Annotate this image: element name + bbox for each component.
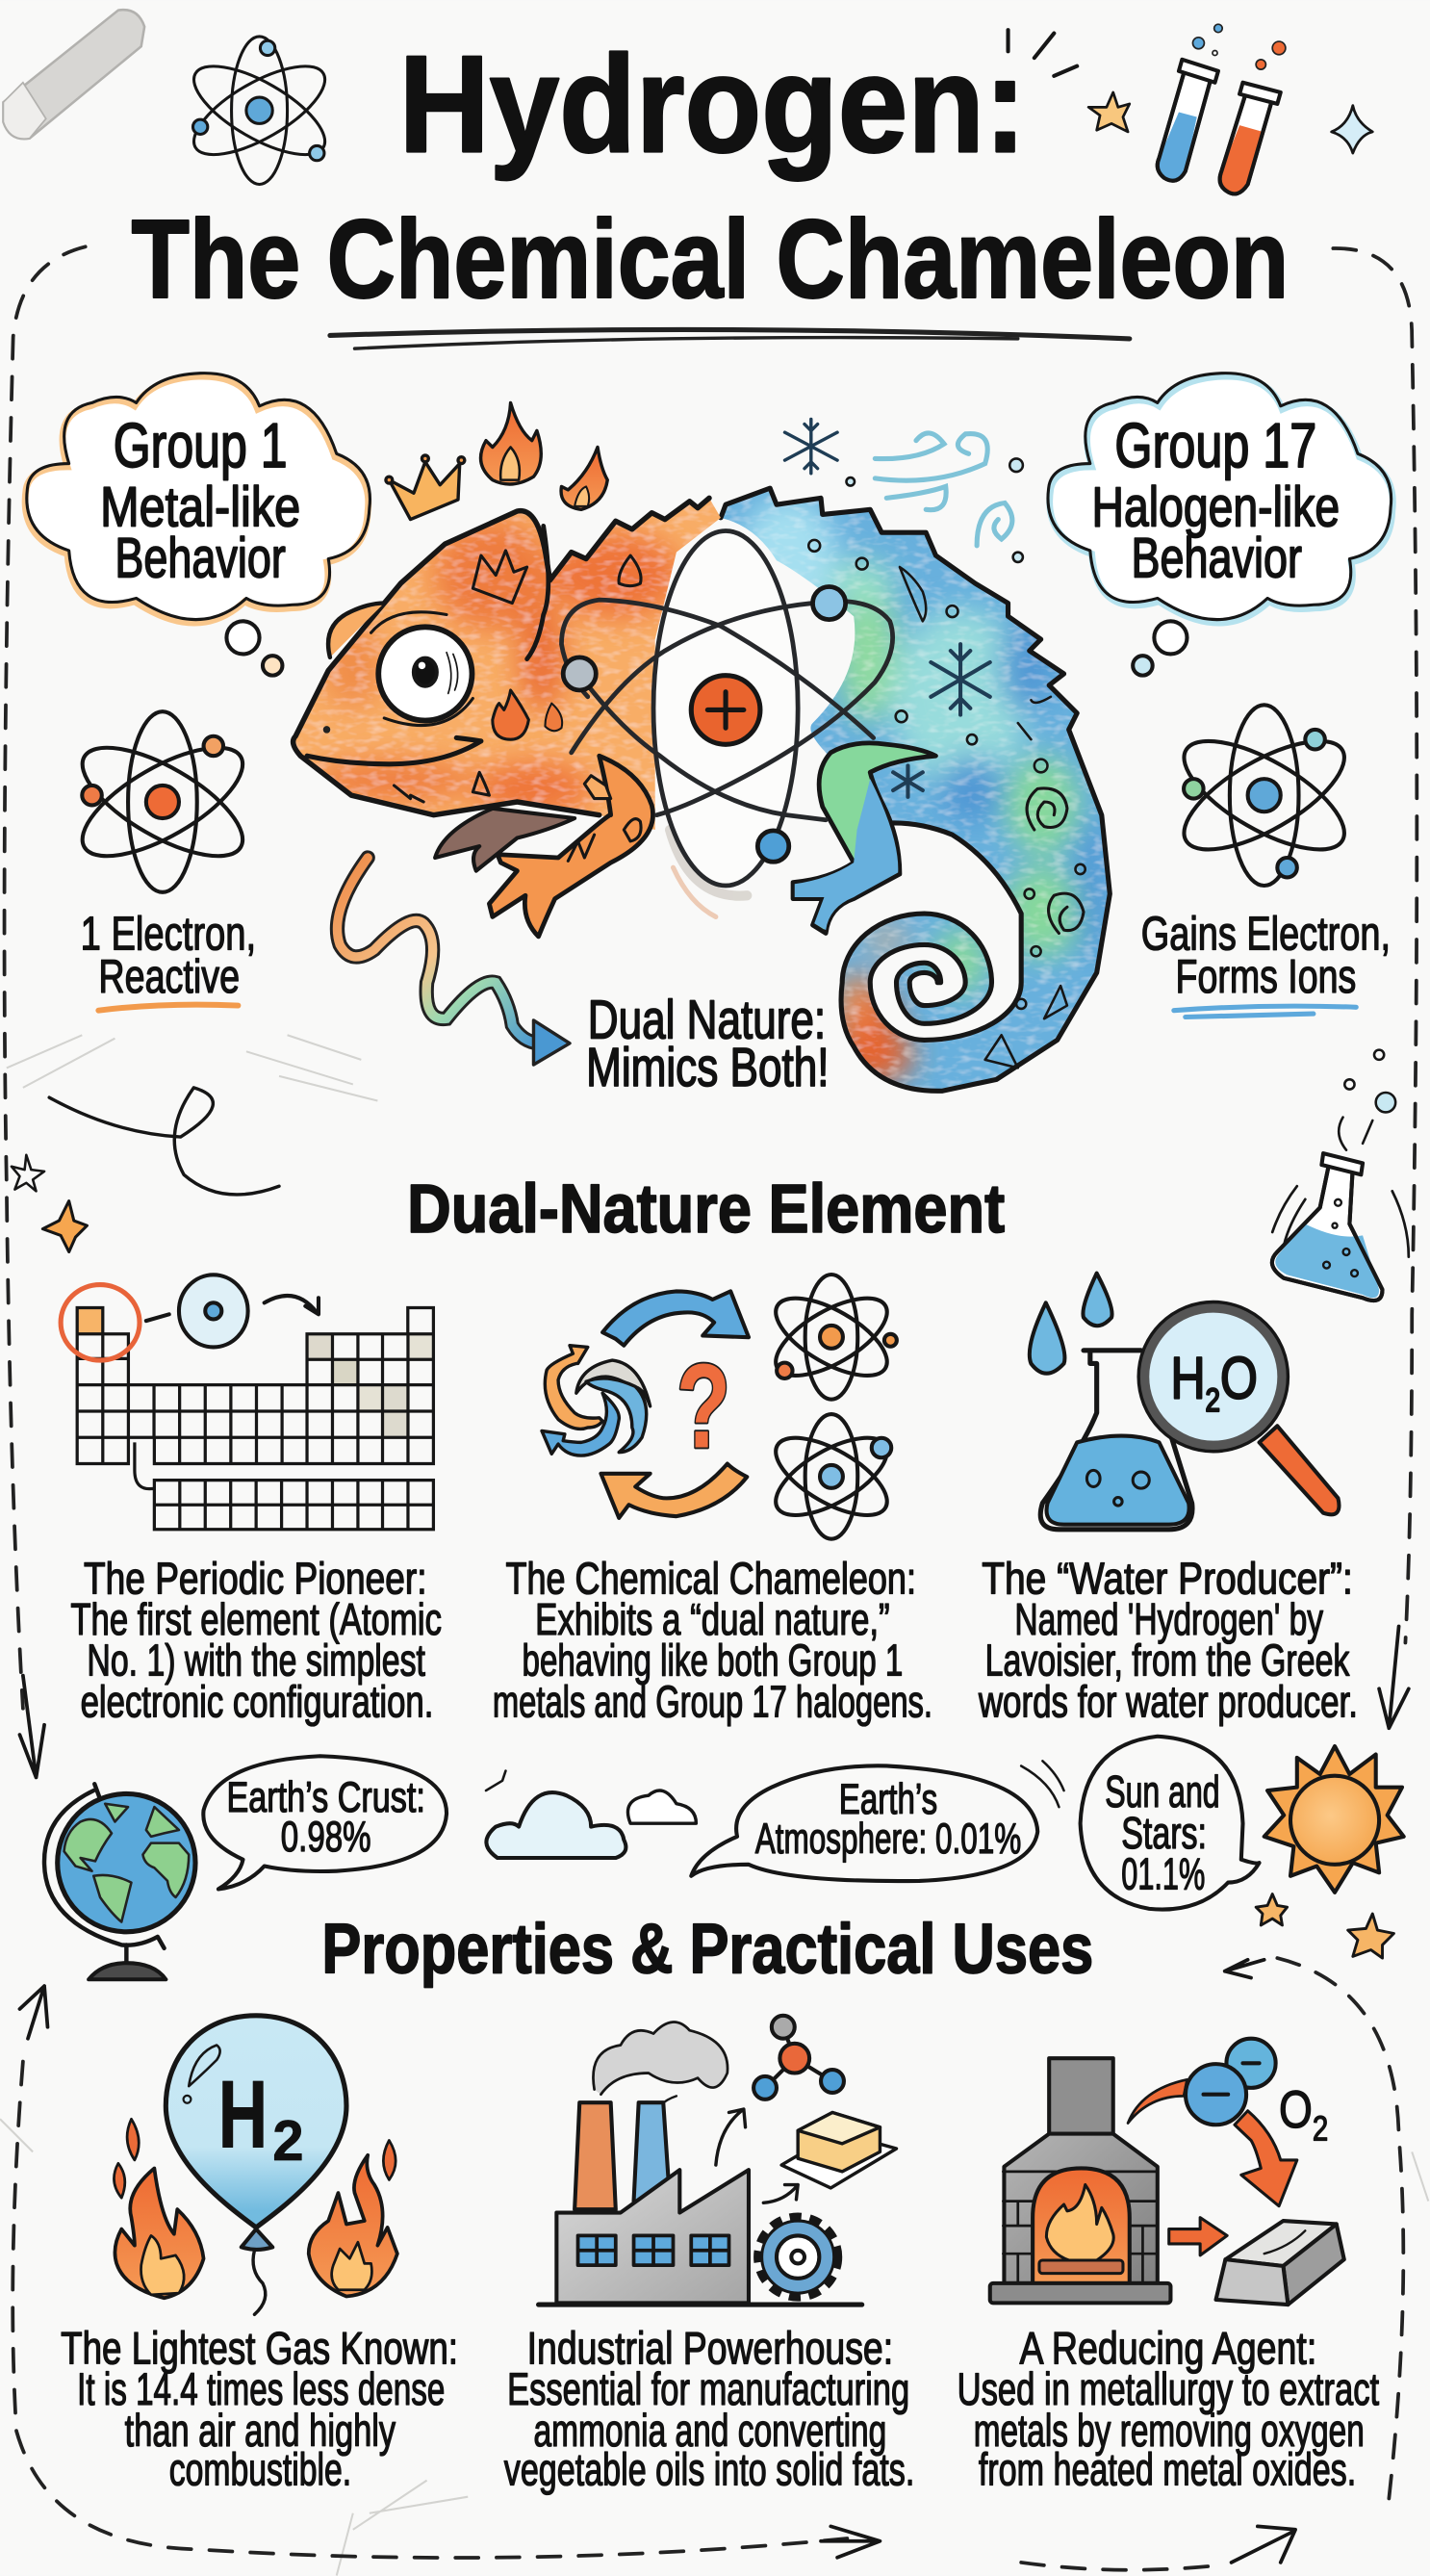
arrows bbox=[716, 2109, 798, 2202]
decorations: snowflake bbox=[785, 419, 837, 474]
icon: clouds bbox=[486, 1771, 696, 1858]
O2 label: O bbox=[1279, 2080, 1319, 2139]
flask bbox=[1040, 1351, 1192, 1530]
text: reducing agent: A Reducing Agent: bbox=[1019, 2323, 1316, 2373]
title line 1: Hydrogen: bbox=[399, 27, 1026, 181]
dashed frame bottom bbox=[13, 1958, 1403, 2570]
icon: test tubes bbox=[1158, 24, 1286, 193]
shaded cells bbox=[77, 1307, 433, 1436]
cloud text: Halogen-like bbox=[1092, 476, 1340, 538]
text: periodic pioneer bbox=[70, 1553, 442, 1726]
atom top bbox=[764, 1275, 899, 1400]
text: 1 electron bbox=[81, 908, 256, 1011]
eraser doodle bbox=[3, 10, 144, 139]
callout: earth's atmosphere bbox=[691, 1761, 1064, 1881]
icon: flask and magnifier bbox=[1030, 1274, 1339, 1530]
thought bubbles bbox=[1133, 621, 1187, 676]
H2O label: H bbox=[1170, 1345, 1213, 1411]
grate bbox=[1039, 2260, 1123, 2274]
eye bbox=[371, 612, 472, 726]
magnifier handle bbox=[1260, 1426, 1339, 1514]
icon: periodic table bbox=[61, 1275, 433, 1530]
snowflake mark bbox=[893, 644, 990, 797]
title bbox=[131, 27, 1289, 322]
question mark: ? bbox=[677, 1339, 730, 1473]
swirl bbox=[542, 1346, 651, 1455]
icon: small stars bbox=[1256, 1894, 1393, 1958]
text: water producer bbox=[978, 1553, 1358, 1726]
text: periodic pioneer: The Periodic Pioneer: bbox=[84, 1553, 427, 1603]
icon: factory bbox=[539, 2016, 897, 2305]
cloud outline bbox=[25, 374, 370, 623]
text: industrial powerhouse: vegetable oils into solid fats. bbox=[504, 2445, 914, 2495]
chimney bbox=[1049, 2058, 1113, 2134]
white ring interior bbox=[653, 530, 798, 886]
text: 1 electron: Reactive bbox=[98, 950, 240, 1003]
text: lightest gas: It is 14.4 times less dense bbox=[77, 2364, 445, 2414]
text: dual nature bbox=[586, 990, 830, 1097]
continents bbox=[64, 1804, 189, 1922]
casque back line bbox=[527, 526, 549, 659]
rear leg bbox=[793, 743, 935, 933]
magnifier lens bbox=[1144, 1307, 1282, 1446]
text: dual nature: Mimics Both! bbox=[586, 1037, 830, 1097]
text: gains electron: Forms Ions bbox=[1176, 950, 1356, 1003]
icon: sun bbox=[1264, 1746, 1404, 1893]
gear bbox=[758, 2218, 837, 2297]
bricks bbox=[1003, 2172, 1158, 2283]
decorations: crown bbox=[386, 455, 465, 520]
icon: globe bbox=[44, 1784, 195, 1979]
cloud text bbox=[1092, 410, 1340, 589]
blue body marks bbox=[808, 540, 1085, 1068]
electrons bbox=[563, 587, 846, 862]
callout: earth's atmosphere: Atmosphere: 0.01% bbox=[755, 1816, 1021, 1863]
icon: orange star bbox=[42, 1201, 87, 1251]
orange body colour bbox=[295, 501, 721, 830]
H2 label: 2 bbox=[272, 2108, 304, 2173]
icon: star bbox=[1088, 92, 1130, 132]
text: chemical chameleon: behaving like both Group 1 bbox=[523, 1636, 903, 1686]
nucleus bbox=[691, 676, 760, 744]
text: lightest gas bbox=[61, 2323, 458, 2495]
ear flap bbox=[328, 604, 384, 657]
building bbox=[556, 2170, 749, 2303]
icon: sparkle star bbox=[12, 1155, 44, 1191]
dashed frame top bbox=[5, 246, 1417, 1777]
orange body outline bbox=[294, 498, 709, 815]
metal ingot bbox=[1216, 2221, 1344, 2305]
loop doodle bbox=[49, 1088, 279, 1195]
text: lightest gas: combustible. bbox=[169, 2445, 351, 2495]
cloud text: Group 1 bbox=[114, 410, 288, 480]
icon: cycle arrows with atoms bbox=[542, 1275, 899, 1539]
atom bottom bbox=[764, 1414, 899, 1539]
text: 1 electron: 1 Electron, bbox=[81, 908, 256, 961]
paper smudges bbox=[0, 1035, 1428, 2576]
callout: earth's crust: Earth’s Crust: bbox=[226, 1774, 425, 1821]
spark ticks bbox=[1009, 30, 1077, 76]
blue arrow bbox=[602, 1291, 749, 1346]
icon: atom left, orange bbox=[67, 711, 258, 892]
text: chemical chameleon: metals and Group 17 halogens. bbox=[493, 1676, 932, 1726]
windows bbox=[578, 2235, 729, 2265]
orange arrow bbox=[600, 1464, 747, 1518]
text: chemical chameleon: The Chemical Chameleon: bbox=[505, 1553, 916, 1603]
thought bubbles bbox=[226, 621, 282, 676]
hydrogen disk bbox=[146, 1275, 319, 1347]
bubbles above flask bbox=[1339, 1050, 1395, 1150]
far leg bbox=[435, 809, 575, 871]
H2O label: 2 bbox=[1206, 1382, 1220, 1419]
cloud outline bbox=[1048, 374, 1392, 623]
callout: earth's crust: 0.98% bbox=[281, 1814, 371, 1861]
callout: Group 17 cloud bbox=[1048, 374, 1392, 676]
icon: atom top left bbox=[182, 37, 338, 185]
icon: atom right, blue bbox=[1169, 705, 1360, 886]
cloud text: Behavior bbox=[115, 527, 286, 589]
callout: earth's atmosphere: Earth’s bbox=[839, 1776, 937, 1823]
central atom bbox=[561, 530, 893, 886]
callout: sun and stars: Stars: bbox=[1121, 1808, 1207, 1858]
arrow: squiggle to dual nature bbox=[337, 858, 570, 1065]
oxygen atoms bbox=[1186, 2039, 1276, 2125]
flames bbox=[114, 2119, 397, 2298]
cloud text bbox=[100, 410, 300, 589]
icon: sparkle bbox=[1332, 106, 1372, 153]
orbits bbox=[561, 530, 893, 886]
text: chemical chameleon: Exhibits a “dual nature,” bbox=[535, 1594, 890, 1644]
text: periodic pioneer: The first element (Atomic bbox=[70, 1594, 442, 1644]
decorations: flames bbox=[481, 402, 607, 509]
hood and body bbox=[1004, 2134, 1158, 2283]
motion smudges under ring bbox=[670, 830, 747, 916]
water drops bbox=[1030, 1274, 1112, 1374]
H2 label: H bbox=[218, 2060, 268, 2167]
swirl marks bbox=[1027, 788, 1084, 933]
text: lightest gas: than air and highly bbox=[125, 2406, 396, 2456]
icon: furnace bbox=[990, 2039, 1344, 2305]
mouth bbox=[307, 737, 481, 764]
text: lightest gas: The Lightest Gas Known: bbox=[61, 2323, 458, 2373]
nostril bbox=[323, 726, 330, 734]
O2 label: 2 bbox=[1313, 2109, 1328, 2148]
chimneys bbox=[575, 2102, 616, 2209]
callout: sun and stars bbox=[1081, 1737, 1260, 1910]
small arrow bbox=[1169, 2218, 1227, 2255]
icon: balloon with flames bbox=[114, 2016, 397, 2314]
ground bbox=[539, 2304, 862, 2306]
chameleon illustration bbox=[279, 402, 1133, 1118]
text: water producer: The “Water Producer”: bbox=[982, 1553, 1353, 1603]
icon: flask top right bbox=[1272, 1153, 1409, 1301]
callout: earth's crust bbox=[203, 1756, 447, 1889]
butter block bbox=[781, 2112, 897, 2188]
callout: sun and stars: Sun and bbox=[1105, 1766, 1220, 1816]
text: industrial powerhouse: Industrial Powerhouse: bbox=[527, 2323, 893, 2373]
H2O label: O bbox=[1220, 1345, 1258, 1411]
text: periodic pioneer: No. 1) with the simplest bbox=[87, 1636, 425, 1686]
cloud text: Metal-like bbox=[100, 476, 300, 538]
text: industrial powerhouse: Essential for manufacturing bbox=[507, 2364, 909, 2414]
smoke bbox=[593, 2022, 728, 2095]
decorations: wind swirls bbox=[875, 433, 1012, 546]
down arrow bbox=[1235, 2111, 1297, 2206]
text: periodic pioneer: electronic configuration. bbox=[81, 1676, 433, 1726]
text: dual nature: Dual Nature: bbox=[588, 990, 826, 1050]
cloud text: Behavior bbox=[1131, 527, 1302, 589]
door bbox=[1033, 2168, 1130, 2283]
text: water producer: Named 'Hydrogen' by bbox=[1014, 1594, 1323, 1644]
skin marks bbox=[394, 551, 641, 861]
base bbox=[990, 2283, 1170, 2303]
blue body outline bbox=[721, 488, 1110, 1091]
fire bbox=[1046, 2185, 1113, 2260]
text: gains electron bbox=[1141, 908, 1391, 1017]
callout: sun and stars: 01.1% bbox=[1121, 1848, 1205, 1898]
cloud text: Group 17 bbox=[1114, 410, 1316, 480]
curved arrow bbox=[1128, 2079, 1187, 2124]
front leg bbox=[489, 756, 653, 937]
callout: Group 1 cloud bbox=[25, 374, 370, 676]
balloon bbox=[166, 2016, 346, 2314]
heading: properties and practical uses: Properties & Practical Uses bbox=[321, 1909, 1093, 1988]
blue body colour bbox=[724, 491, 1108, 1089]
title underline bbox=[330, 329, 1130, 348]
text: industrial powerhouse bbox=[504, 2323, 914, 2495]
heading: dual-nature element: Dual-Nature Element bbox=[407, 1171, 1005, 1248]
molecule bbox=[753, 2016, 844, 2099]
red circle highlight bbox=[61, 1285, 140, 1360]
grid bbox=[77, 1307, 433, 1530]
text: industrial powerhouse: ammonia and converting bbox=[533, 2406, 886, 2456]
text: reducing agent bbox=[958, 2323, 1379, 2495]
text: chemical chameleon bbox=[493, 1553, 932, 1726]
